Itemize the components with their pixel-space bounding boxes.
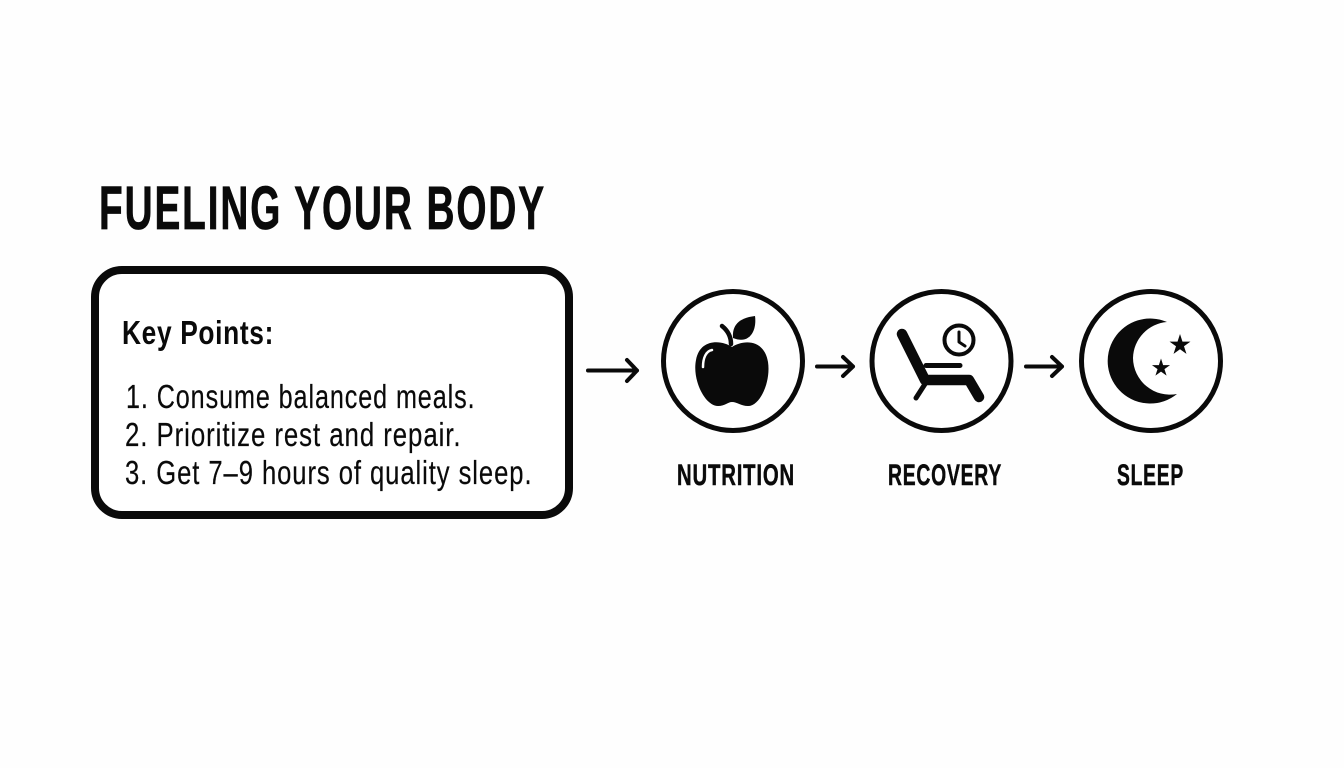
panel border <box>95 270 569 515</box>
label: sleep: SLEEP <box>1117 459 1184 492</box>
list item 3: 3. Get 7–9 hours of quality sleep. <box>125 454 532 491</box>
icon: sleep moon and stars in circle <box>1082 292 1220 430</box>
arrow: recovery to sleep <box>1026 357 1062 376</box>
title: FUELING YOUR BODY <box>99 174 546 242</box>
list item 2: 2. Prioritize rest and repair. <box>125 416 462 453</box>
arrow: panel to nutrition <box>588 360 637 381</box>
icon: recovery lounge chair and clock in circle <box>872 292 1011 430</box>
arrow: nutrition to recovery <box>817 357 853 376</box>
panel: key points <box>95 270 569 515</box>
label: recovery: RECOVERY <box>888 459 1002 492</box>
label: nutrition: NUTRITION <box>677 459 795 492</box>
icon: nutrition apple in circle <box>664 292 802 430</box>
list item 1: 1. Consume balanced meals. <box>126 378 476 415</box>
panel heading: Key Points: <box>122 314 274 351</box>
